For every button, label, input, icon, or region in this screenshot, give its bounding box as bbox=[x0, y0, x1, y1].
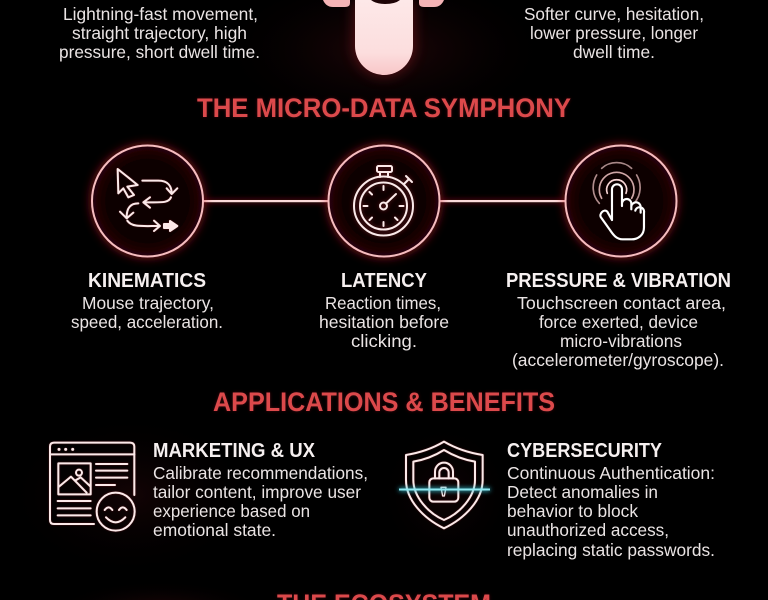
description: pressure and vibration: Touchscreen contact area, bbox=[517, 293, 726, 313]
description: kinematics: Mouse trajectory, bbox=[82, 293, 214, 313]
description: pressure and vibration: force exerted, device bbox=[539, 312, 698, 332]
icon: stopwatch circle bbox=[328, 146, 440, 256]
description: marketing and ux: experience based on bbox=[153, 501, 310, 521]
icon: cursor and arrows circle bbox=[92, 146, 203, 256]
text: soft movement description: dwell time. bbox=[573, 42, 655, 62]
description: cybersecurity: Continuous Authentication: bbox=[507, 463, 715, 483]
description: cybersecurity: replacing static passwords. bbox=[507, 540, 715, 560]
label: latency: LATENCY bbox=[341, 270, 428, 292]
description: pressure and vibration bbox=[512, 293, 726, 370]
label: pressure and vibration: PRESSURE & VIBRATION bbox=[506, 270, 731, 292]
description: cybersecurity: unauthorized access, bbox=[507, 520, 669, 540]
description: marketing and ux: Calibrate recommendations, bbox=[153, 463, 368, 483]
panel: pressure and vibration bbox=[506, 146, 731, 370]
description: pressure and vibration: (accelerometer/gyroscope). bbox=[512, 350, 724, 370]
description: pressure and vibration: micro-vibrations bbox=[560, 331, 682, 351]
description: latency: Reaction times, bbox=[325, 293, 441, 313]
description: latency: hesitation before bbox=[319, 312, 449, 332]
description: cybersecurity: Detect anomalies in bbox=[507, 482, 658, 502]
text: fast movement description bbox=[59, 4, 260, 62]
icon: browser window with smiley bbox=[50, 443, 135, 531]
icon: shield with lock and scan line bbox=[399, 442, 490, 528]
description: kinematics: speed, acceleration. bbox=[71, 312, 223, 332]
description: marketing and ux: tailor content, improve user bbox=[153, 482, 361, 502]
description: marketing and ux: emotional state. bbox=[153, 520, 276, 540]
description: kinematics bbox=[71, 293, 223, 332]
heading: applications and benefits: APPLICATIONS & BENEFITS bbox=[213, 387, 555, 417]
text: fast movement description: straight trajectory, high bbox=[72, 23, 247, 43]
text: soft movement description bbox=[524, 4, 704, 62]
icon: touch hand circle bbox=[566, 146, 676, 256]
connector lines bbox=[203, 200, 565, 202]
panel: cybersecurity bbox=[399, 440, 715, 560]
text: fast movement description: pressure, short dwell time. bbox=[59, 42, 260, 62]
panel: kinematics bbox=[71, 146, 223, 332]
description: marketing and ux bbox=[153, 463, 368, 540]
icon: glowing finger bbox=[323, 0, 444, 76]
text: fast movement description: Lightning-fast movement, bbox=[63, 4, 258, 24]
heading: the micro-data symphony: THE MICRO-DATA SYMPHONY bbox=[197, 93, 571, 123]
title: marketing and ux: MARKETING & UX bbox=[153, 440, 316, 462]
panel: marketing and ux bbox=[50, 440, 368, 540]
title: cybersecurity: CYBERSECURITY bbox=[507, 440, 663, 462]
text: soft movement description: lower pressure, longer bbox=[530, 23, 698, 43]
description: latency bbox=[319, 293, 449, 351]
description: latency: clicking. bbox=[351, 331, 417, 351]
panel: latency bbox=[319, 146, 449, 351]
label: kinematics: KINEMATICS bbox=[88, 270, 206, 292]
description: cybersecurity bbox=[507, 463, 715, 560]
description: cybersecurity: behavior to block bbox=[507, 501, 638, 521]
text: soft movement description: Softer curve, hesitation, bbox=[524, 4, 704, 24]
